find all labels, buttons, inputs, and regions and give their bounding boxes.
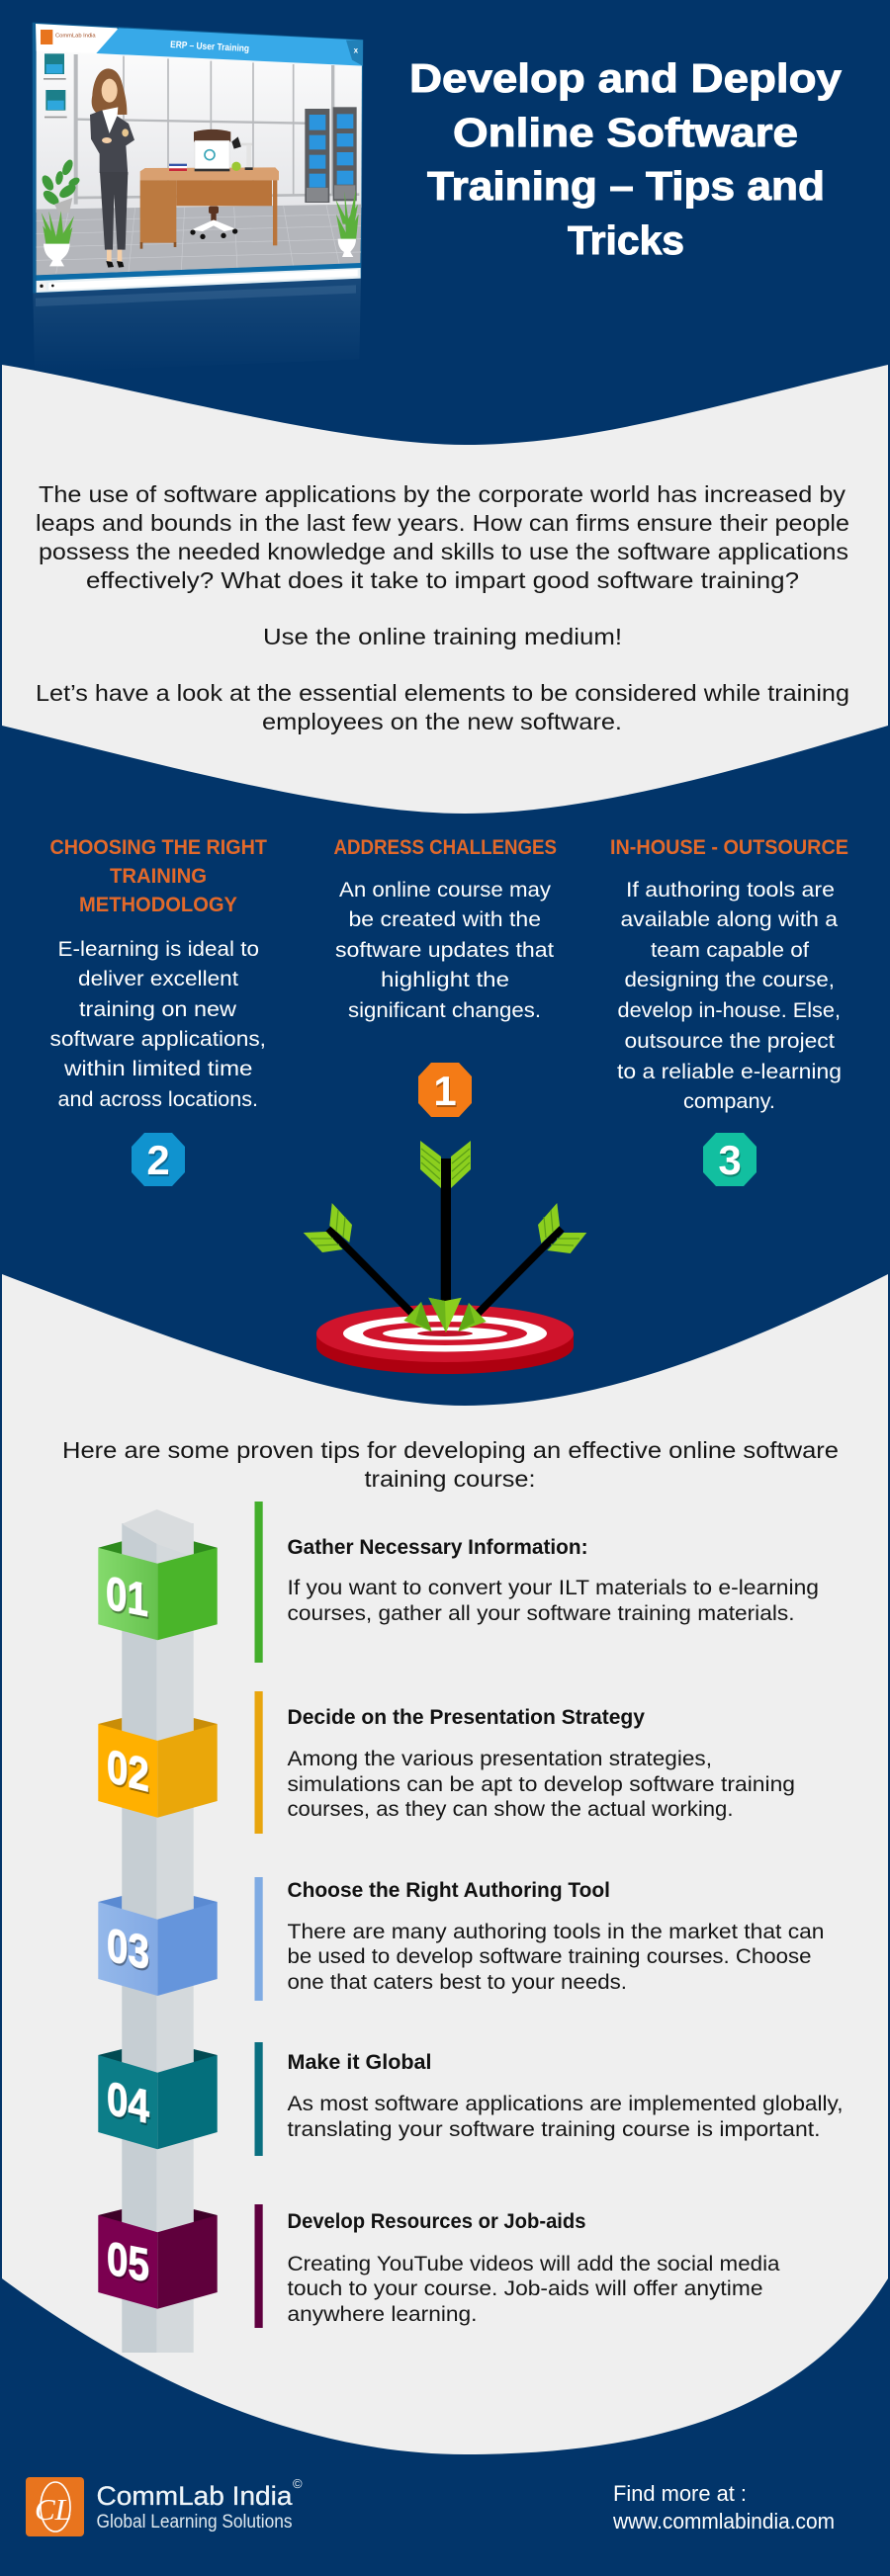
tip 4: Make it Global [287, 2051, 431, 2074]
number 01: 01 [106, 1567, 148, 1627]
body text: deliver excellent [78, 967, 238, 990]
tip cube 02 [98, 1724, 218, 1818]
intro text block [36, 481, 849, 734]
body text: If authoring tools are [626, 878, 835, 902]
arrow: centre [420, 1141, 471, 1332]
body text: software applications, [49, 1027, 266, 1051]
footer logo [26, 2477, 84, 2536]
tip 1: courses, gather all your software training materials. [287, 1602, 795, 1625]
intro text block: employees on the new software. [262, 709, 622, 734]
body text [617, 878, 842, 1113]
tip 3: There are many authoring tools in the market that can [287, 1921, 825, 1943]
tip 2: simulations can be apt to develop software training [287, 1773, 795, 1796]
tip 5: touch to your course. Job-aids will offer anytime [287, 2277, 763, 2300]
tip 4: translating your software training course is important. [287, 2118, 821, 2141]
tip cube 04 [98, 2055, 218, 2149]
tip cube 05 [98, 2215, 218, 2309]
arrow: left [304, 1203, 432, 1331]
body text: significant changes. [348, 998, 541, 1022]
footer link [612, 2481, 835, 2533]
window frame [33, 23, 363, 294]
tip cube 03 [98, 1902, 218, 1996]
heading: IN-HOUSE - OUTSOURCE [610, 836, 848, 859]
plants [40, 158, 359, 266]
chair [190, 207, 237, 239]
body text: highlight the [381, 968, 509, 991]
number 05: 05 [107, 2232, 149, 2292]
office window grid [76, 54, 359, 205]
body text: E-learning is ideal to [57, 937, 259, 961]
header logo panel [36, 24, 118, 53]
tip 5: anywhere learning. [287, 2303, 477, 2326]
desk [140, 167, 279, 249]
close x: x [354, 45, 359, 54]
window logo [41, 30, 52, 44]
tip 1: If you want to convert your ILT materials to e-learning [287, 1577, 819, 1599]
intro text block: The use of software applications by the corporate world has increased by [39, 481, 846, 507]
panel: choosing the right training methodology [49, 836, 267, 1186]
tip 2: Decide on the Presentation Strategy [287, 1706, 645, 1729]
intro text block: Use the online training medium! [263, 624, 622, 649]
footer link: www.commlabindia.com [612, 2509, 835, 2533]
badge 2 [132, 1133, 185, 1186]
intro text block: possess the needed knowledge and skills to use the software applications [39, 539, 848, 564]
tip 3 [255, 1877, 825, 2001]
body text: company. [683, 1089, 775, 1113]
target with arrows [304, 1141, 586, 1374]
tip 5 [255, 2204, 780, 2328]
title: Tricks [568, 217, 684, 263]
badge 1: 1 [433, 1068, 457, 1114]
tip 2: Among the various presentation strategies, [287, 1748, 712, 1770]
tips intro text: Here are some proven tips for developing an effective online software [62, 1437, 839, 1463]
panel: address challenges [334, 836, 557, 1117]
body text: to a reliable e-learning [617, 1060, 842, 1083]
body text: be created with the [348, 907, 541, 931]
woman [90, 68, 134, 268]
office wall [37, 25, 362, 213]
title [409, 55, 842, 263]
body text: team capable of [651, 938, 809, 962]
footer brand name [97, 2476, 303, 2533]
tip 4: As most software applications are implemented globally, [287, 2093, 843, 2115]
heading: ADDRESS CHALLENGES [334, 836, 557, 859]
footer brand name: © [293, 2476, 303, 2491]
tip 2 [255, 1691, 795, 1834]
tip 3: one that caters best to your needs. [287, 1971, 627, 1994]
header close tab [346, 41, 363, 66]
header title: ERP – User Training [170, 40, 249, 54]
body text [49, 937, 266, 1111]
laptop and desk items [169, 129, 253, 171]
body text: software updates that [335, 938, 554, 962]
footer brand name: Global Learning Solutions [97, 2512, 293, 2533]
shelves [305, 107, 357, 203]
floor tiles [37, 205, 361, 274]
player bar [37, 263, 361, 293]
heading: METHODOLOGY [79, 894, 237, 916]
body text: outsource the project [625, 1029, 835, 1053]
panel: tips light band [2, 1274, 888, 2454]
pillar [122, 1509, 194, 2353]
floor [37, 205, 361, 275]
tips intro text [62, 1437, 839, 1492]
body text [335, 878, 554, 1022]
heading [49, 836, 267, 916]
target board [316, 1305, 574, 1374]
tips intro text: training course: [364, 1466, 536, 1492]
intro text block: leaps and bounds in the last few years. How can firms ensure their people [36, 510, 849, 536]
illustration: software training window [33, 23, 363, 373]
badge 2: 2 [146, 1137, 170, 1183]
body text: within limited time [63, 1057, 253, 1080]
panel: in-house outsource [610, 836, 848, 1186]
badge 3 [703, 1133, 756, 1186]
panel: intro light band [2, 365, 888, 814]
tip 2: courses, as they can show the actual working. [287, 1798, 734, 1821]
badge 3: 3 [718, 1137, 742, 1183]
title: Online Software [453, 110, 798, 155]
title: Training – Tips and [427, 163, 825, 209]
tip 5: Creating YouTube videos will add the social media [287, 2253, 780, 2275]
body text: An online course may [339, 878, 551, 902]
arrow: right [458, 1203, 586, 1331]
tip 1 [255, 1502, 819, 1663]
body text: designing the course, [625, 968, 835, 991]
tip 1: Gather Necessary Information: [287, 1536, 587, 1559]
body text: develop in-house. Else, [617, 998, 841, 1022]
sidebar thumbnails [44, 53, 67, 118]
title: Develop and Deploy [409, 55, 842, 101]
tip 3: Choose the Right Authoring Tool [287, 1879, 610, 1902]
number 04: 04 [107, 2073, 149, 2134]
footer brand name: CommLab India [97, 2481, 294, 2511]
tip cube 01 [98, 1548, 218, 1640]
body text: and across locations. [57, 1087, 258, 1111]
badge 1 [418, 1063, 472, 1117]
footer link: Find more at : [613, 2481, 747, 2506]
heading: CHOOSING THE RIGHT [49, 836, 267, 859]
tip 5: Develop Resources or Job-aids [287, 2210, 585, 2233]
cube back flaps [98, 1541, 218, 2227]
intro text block: Let’s have a look at the essential elements to be considered while training [36, 680, 849, 706]
body text: available along with a [621, 907, 838, 931]
header banner [96, 28, 363, 66]
tip 3: be used to develop software training courses. Choose [287, 1945, 811, 1968]
footer logo: CL [35, 2492, 72, 2527]
window reflection [33, 279, 361, 373]
intro text block: effectively? What does it take to impart good software training? [86, 567, 799, 593]
tip 4 [255, 2042, 843, 2156]
number 02: 02 [107, 1741, 149, 1803]
window logo text: CommLab India [55, 33, 96, 39]
body text: training on new [79, 997, 237, 1021]
number 03: 03 [107, 1919, 149, 1980]
heading: TRAINING [110, 865, 207, 888]
